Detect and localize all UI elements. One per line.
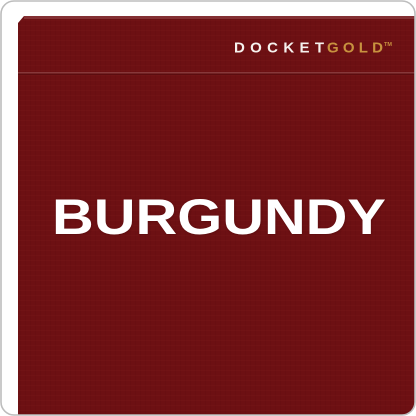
colour name shadow: BURGUNDY (52, 190, 386, 246)
brand word: DOCKET: DOCKET (234, 40, 324, 56)
brand logo (234, 40, 392, 56)
tab fold line (18, 72, 416, 75)
brand word: GOLD: GOLD (327, 40, 383, 56)
folder top highlight (24, 16, 416, 19)
trademark: TM (384, 42, 392, 48)
colour name: BURGUNDY (52, 189, 386, 245)
